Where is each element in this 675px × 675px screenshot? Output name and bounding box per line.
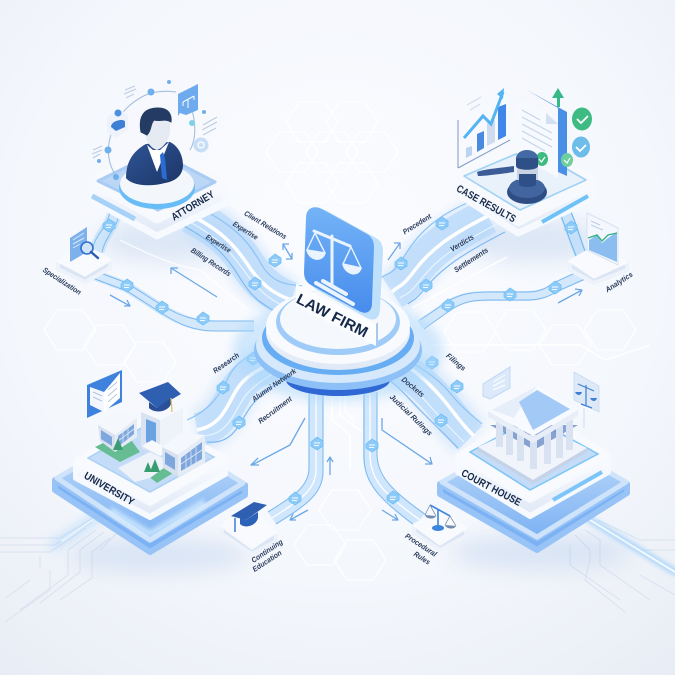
hub: scales tile [304, 207, 383, 320]
icon: bar chart panel [458, 88, 510, 168]
flow labels: Judicial Rulings [388, 392, 434, 438]
icon: university buildings [98, 408, 205, 477]
label: case results: CASE RESULTS [454, 183, 518, 225]
icon: court building [478, 385, 587, 484]
circuit traces: bottom right [570, 520, 675, 612]
icon: green arrow [552, 88, 564, 107]
node: court house [440, 367, 627, 550]
hub: law firm base [254, 288, 422, 396]
flow labels [41, 209, 634, 574]
label: court house: COURT HOUSE [459, 467, 523, 509]
arrows [110, 243, 582, 520]
lawn and paths [95, 432, 140, 462]
node: attorney [92, 80, 226, 236]
pedestal [119, 167, 195, 209]
soft platform shadows [70, 218, 630, 573]
flow labels: Precedent [401, 211, 433, 236]
left wing [98, 410, 137, 435]
icon: analytics chart panel [587, 213, 618, 265]
icon: attorney person [126, 108, 183, 185]
hexagon grid [44, 102, 636, 580]
trees [113, 438, 160, 472]
icon: graduation cap [231, 502, 267, 532]
icon: speech panel [483, 367, 510, 399]
flow labels: Research [211, 351, 241, 375]
flow labels: Recruitment [256, 394, 294, 426]
icon: graduation cap on roof [139, 382, 181, 412]
flow labels: Expertise [231, 219, 260, 242]
flow labels: Client Relations [243, 209, 288, 241]
flow labels: Alumni Network [249, 366, 298, 404]
icon: document stack [517, 89, 567, 178]
icon: open book [87, 370, 122, 418]
flow labels: Dockets [400, 375, 426, 399]
flow: case results to analytics [412, 212, 592, 329]
node: analytics tile [570, 213, 627, 283]
glass base [440, 484, 627, 550]
flow: attorney to law firm [180, 206, 302, 312]
icon: person badge [107, 109, 128, 138]
data packets [103, 217, 577, 505]
decorative text lines [92, 86, 217, 158]
circuit traces: bottom left [0, 515, 120, 622]
node: procedural rules tile [414, 505, 466, 550]
beam: bottom right light trace [570, 500, 675, 572]
white circuit lines under hub [332, 345, 650, 470]
node: continuing education tile [222, 502, 276, 554]
flow: law firm to procedural rules [364, 392, 426, 525]
flow labels: Filings [444, 351, 468, 373]
flow: law firm to continuing education [268, 392, 323, 524]
icon: gavel [477, 150, 547, 204]
label: university: UNIVERSITY [82, 470, 136, 508]
flow labels: Analytics [603, 270, 634, 295]
flow labels: Continuing [250, 537, 285, 565]
flow: university to law firm [187, 350, 300, 442]
flow labels: Verdicts [449, 232, 475, 254]
node: specialization tile [58, 227, 110, 282]
flow labels: Expertise [204, 232, 233, 255]
center tower [141, 412, 160, 456]
flow labels: Billing Records [189, 246, 233, 278]
flow labels: Procedural [403, 531, 439, 559]
label: law firm: LAW FIRM [293, 291, 371, 341]
flow labels: Specialization [41, 265, 83, 297]
node: case results [454, 88, 595, 233]
node: university [55, 370, 245, 552]
icon: check badges [536, 108, 592, 167]
icon: scale speech bubble [178, 84, 198, 116]
icon: blue scales [425, 505, 456, 531]
flow: attorney to specialization [92, 212, 254, 331]
icon: document with magnifier [70, 227, 98, 262]
flow labels: Rules [412, 549, 432, 567]
hub: law firm plaque [293, 284, 378, 346]
icon: scales of justice [307, 231, 361, 304]
icon: scales sign [574, 372, 599, 428]
beam: bottom left light trace [55, 508, 110, 545]
flow labels: Education [251, 548, 284, 574]
icon: orbit nodes [97, 80, 206, 180]
label: attorney: ATTORNEY [169, 188, 217, 224]
icon: gear badge [194, 138, 208, 152]
flow: case results to law firm [378, 203, 505, 304]
glass base [55, 480, 245, 552]
right wing [162, 433, 205, 455]
band glow underlay [190, 215, 488, 438]
icon: orbit ring [108, 91, 195, 175]
hub glow [233, 298, 443, 402]
flow: court house to law firm [367, 352, 482, 448]
flow labels: Settlements [452, 246, 490, 274]
